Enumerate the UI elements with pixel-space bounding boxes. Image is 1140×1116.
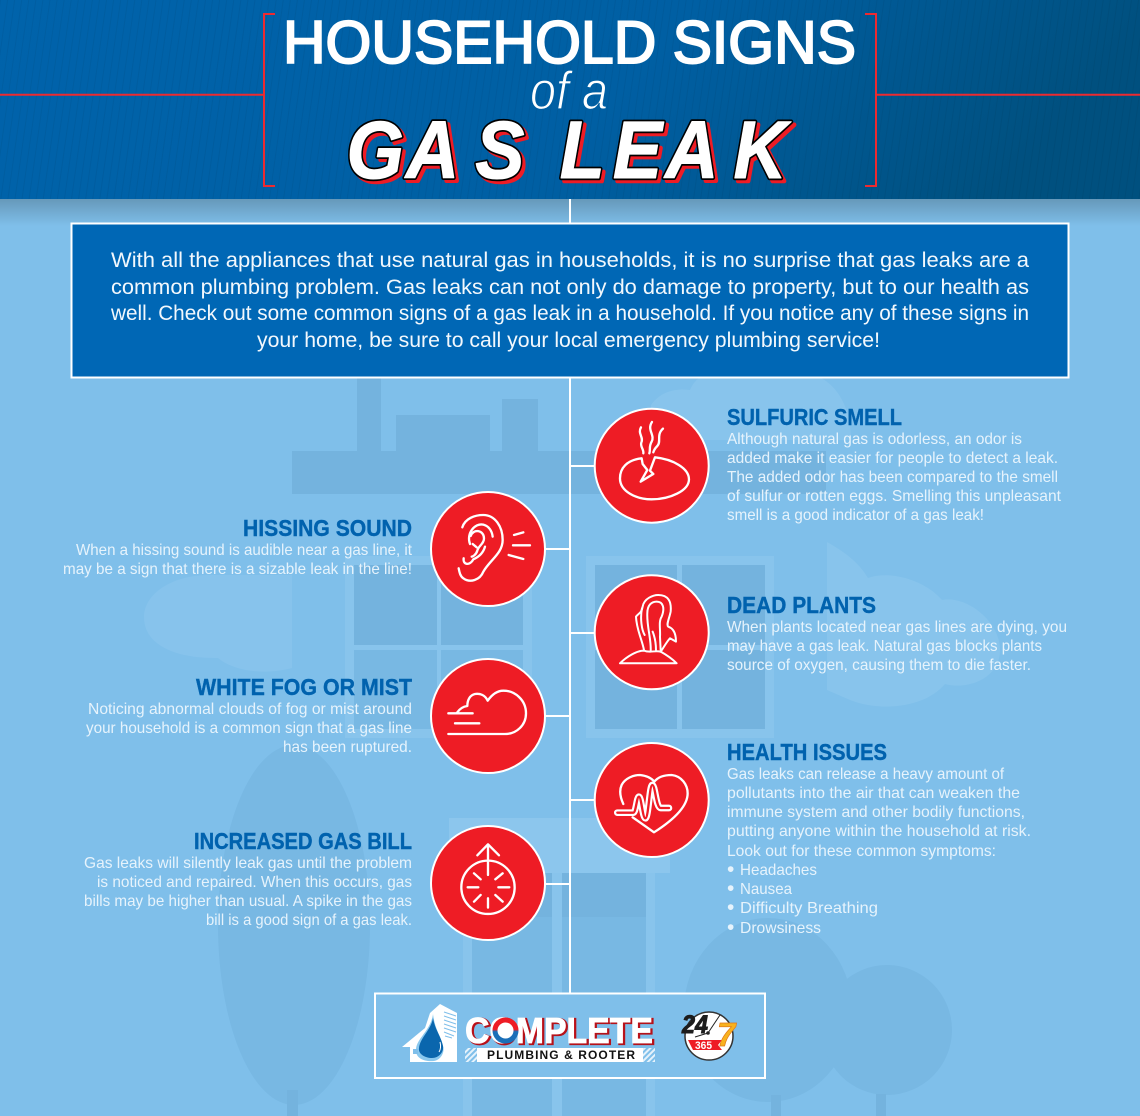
description — [727, 619, 1067, 674]
description: • — [727, 858, 734, 881]
title line 3: GASLEAK — [350, 106, 795, 199]
title line 3: GASLEAK — [347, 103, 792, 196]
description: Nausea — [740, 881, 792, 898]
intro panel: With all the appliances that use natural gas in households, it is no surprise that gas leaks are a — [111, 249, 1029, 272]
intro panel: your home, be sure to call your local emergency plumbing service! — [257, 329, 880, 352]
description: Difficulty Breathing — [740, 900, 878, 917]
description: added make it easier for people to detect a leak. — [727, 450, 1058, 467]
description: • — [727, 916, 734, 939]
heading: INCREASED GAS BILL — [194, 828, 412, 854]
description: has been ruptured. — [283, 739, 412, 756]
description: may be a sign that there is a sizable leak in the line! — [63, 561, 412, 578]
description: Drowsiness — [740, 920, 821, 937]
sign: white fog or mist — [86, 659, 545, 773]
description: Look out for these common symptoms: — [727, 843, 996, 860]
description: smell is a good indicator of a gas leak! — [727, 507, 984, 524]
description: is noticed and repaired. When this occurs, gas — [97, 874, 412, 891]
description — [727, 431, 1062, 524]
description: may have a gas leak. Natural gas blocks plants — [727, 638, 1042, 655]
heading: HISSING SOUND — [243, 515, 412, 541]
description: source of oxygen, causing them to die faster. — [727, 657, 1031, 674]
description: bills may be higher than usual. A spike in the gas — [84, 893, 412, 910]
intro panel: common plumbing problem. Gas leaks can not only do damage to property, but to our health as — [111, 276, 1029, 299]
description: Gas leaks will silently leak gas until the problem — [84, 855, 412, 872]
sign: hissing sound — [63, 492, 545, 606]
icon: heart with pulse — [595, 743, 709, 857]
description: When plants located near gas lines are dying, you — [727, 619, 1067, 636]
icon: gauge with up arrow — [431, 826, 545, 940]
sign: sulfuric smell — [595, 404, 1062, 524]
icon: wilted plant — [595, 575, 709, 689]
description: putting anyone within the household at risk. — [727, 823, 1031, 840]
description: Headaches — [740, 862, 817, 879]
description: • — [727, 896, 734, 919]
heading: WHITE FOG OR MIST — [196, 674, 412, 700]
header red rules and brackets — [0, 14, 1140, 186]
intro panel — [72, 224, 1068, 378]
description: pollutants into the air that can weaken the — [727, 785, 1020, 802]
description: your household is a common sign that a gas line — [86, 720, 412, 737]
header shadow — [0, 198, 1140, 226]
description — [727, 766, 1031, 939]
heading: HEALTH ISSUES — [727, 739, 887, 765]
sign: increased gas bill — [84, 826, 545, 940]
logo mark: house, building and water drop — [402, 1004, 457, 1062]
description: Gas leaks can release a heavy amount of — [727, 766, 1005, 783]
header banner — [0, 0, 1140, 199]
badge: 24/7 365: 365 — [695, 1040, 712, 1052]
heading: DEAD PLANTS — [727, 592, 876, 618]
badge: 24/7 365: 7 — [717, 1016, 737, 1053]
sign: health issues — [595, 739, 1031, 939]
description: • — [727, 877, 734, 900]
description: of sulfur or rotten eggs. Smelling this unpleasant — [727, 488, 1062, 505]
description — [63, 542, 413, 578]
logo tagline: PLUMBING & ROOTER — [487, 1048, 635, 1062]
center timeline — [545, 198, 596, 994]
badge: 24/7 365: 24 — [681, 1011, 708, 1039]
background house silhouette — [144, 372, 1000, 1116]
icon: cracked egg with odor — [595, 409, 709, 523]
description: When a hissing sound is audible near a gas line, it — [76, 542, 413, 559]
description — [86, 701, 412, 756]
badge: 24/7 365 — [681, 1011, 737, 1060]
logo wordmark front: COMPLETE — [465, 1010, 653, 1051]
description: Although natural gas is odorless, an odor is — [727, 431, 1022, 448]
logo wordmark shadow: COMPLETE — [467, 1011, 655, 1052]
footer logo panel — [375, 994, 765, 1078]
title line 3: GASLEAK — [347, 103, 792, 196]
description — [84, 855, 412, 929]
title line 1: HOUSEHOLD SIGNS — [283, 9, 856, 76]
description: The added odor has been compared to the smell — [727, 469, 1058, 486]
description: Noticing abnormal clouds of fog or mist around — [88, 701, 412, 718]
description: immune system and other bodily functions, — [727, 804, 1025, 821]
icon: cloud — [431, 659, 545, 773]
logo wordmark O ring — [495, 1020, 516, 1041]
heading: SULFURIC SMELL — [727, 404, 902, 430]
title line 2: of a — [530, 61, 608, 121]
description: bill is a good sign of a gas leak. — [206, 912, 412, 929]
icon: ear — [431, 492, 545, 606]
intro panel: well. Check out some common signs of a gas leak in a household. If you notice any of these signs in — [110, 302, 1029, 325]
sign: dead plants — [595, 575, 1067, 689]
